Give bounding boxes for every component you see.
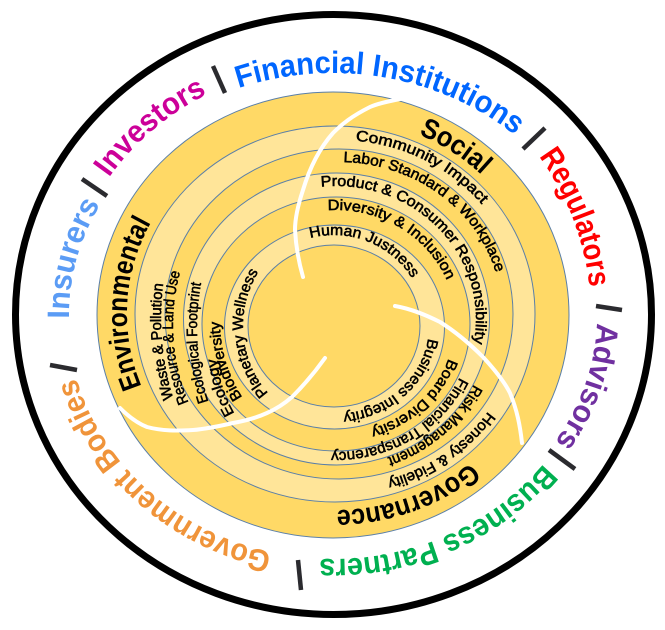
governance items: Board Diversity [372,359,458,437]
environmental items: Ecology [208,359,234,418]
social items: Diversity & Inclusion [328,198,454,280]
stakeholder: Regulators: Regulators [540,146,606,286]
environmental items: Planetary Wellness [232,269,268,399]
white spiral dividers [120,99,522,443]
governance items: Honesty & Fidelity [389,412,496,488]
separator bars [50,66,622,590]
social items: Labor Standard & Workplace [344,152,503,272]
heading: Social: Social [421,119,494,174]
social items: Human Justness [309,226,418,278]
stakeholder: Insurers: Insurers [48,200,98,317]
governance items [330,339,496,488]
environmental items: Waste & Pollution [150,284,173,402]
environmental items [150,269,268,418]
stakeholder: Financial Institutions: Financial Institutions [234,50,522,132]
environmental items: Resource & Land Use [162,271,188,406]
stakeholder: Government Bodies: Government Bodies [62,380,269,572]
heading: Environmental: Environmental [108,214,150,392]
social items: Community Impact [356,130,488,205]
stakeholder: Business Partners: Business Partners [320,465,558,576]
environmental items: Biodiversity [210,322,242,402]
concentric rings [97,92,569,538]
governance items: Risk Management [387,385,483,466]
stakeholder: Investors: Investors [93,82,204,176]
heading: Governance: Governance [338,466,478,525]
stakeholder: Advisors: Advisors [558,324,618,448]
governance items: Financial Transparency [330,378,469,460]
governance items: Business Integrity [344,339,438,423]
social items [309,130,503,346]
environmental items: Ecological Footprint [186,282,208,404]
social items: Product & Consumer Responsibility [321,176,488,346]
